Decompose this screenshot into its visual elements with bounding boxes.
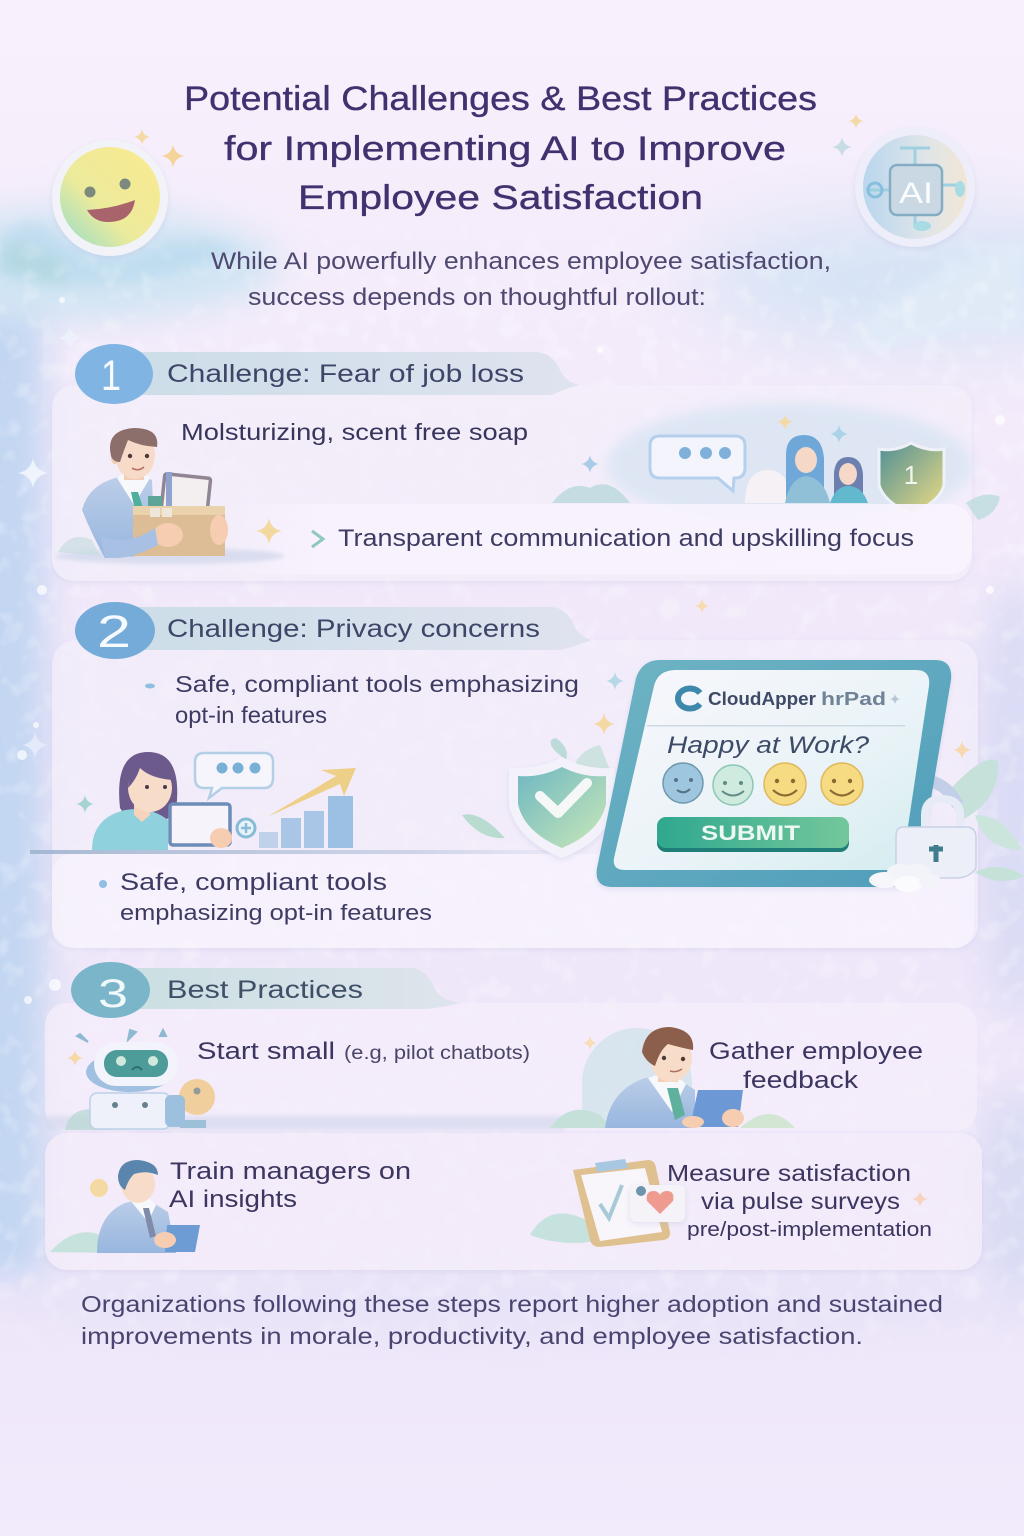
header bar 3 (110, 968, 460, 1009)
text: gather feedback: feedback (743, 1067, 859, 1094)
panel: challenge 2 (30, 599, 1024, 948)
icon: smiley badge (52, 129, 184, 256)
arrow chevron (312, 531, 323, 547)
title: for Implementing AI to Improve (224, 130, 786, 168)
text: safe tools top: Safe, compliant tools emphasizing (175, 671, 579, 697)
text: measure satisfaction: Measure satisfaction (667, 1160, 911, 1186)
illustration: survey tablet (597, 660, 951, 887)
illustration: shield with check (462, 738, 615, 858)
illustration: employee with tablet and chart (30, 752, 590, 854)
background wash (0, 200, 1024, 1333)
text: safe tools bottom (99, 869, 432, 925)
divider band (45, 1116, 565, 1130)
header bar 1 (110, 352, 580, 395)
text: soap line: Molsturizing, scent free soap (181, 419, 528, 445)
text: measure satisfaction: via pulse surveys (701, 1188, 900, 1214)
icon: clipboard with heart (530, 1159, 685, 1247)
lower callout 1 (220, 504, 972, 574)
icon: employee with box (55, 428, 285, 564)
text: train managers: AI insights (169, 1186, 297, 1213)
logo: CloudApper (678, 689, 900, 709)
panel 2 card (52, 640, 978, 948)
icon: manager with tablet (50, 1160, 200, 1253)
text: safe tools top (145, 671, 579, 728)
panel: best practices (45, 962, 982, 1270)
number badge 2 (75, 602, 155, 659)
text: measure satisfaction: pre/post-implementation (687, 1219, 932, 1241)
rating faces (663, 763, 863, 805)
number badge 3: 3 (98, 972, 128, 1016)
heading 2: Challenge: Privacy concerns (167, 615, 540, 643)
text: safe tools bottom: Safe, compliant tools (120, 869, 387, 896)
panel 3 lower card (45, 1133, 982, 1270)
number badge 3 (71, 962, 150, 1018)
text: start small (197, 1038, 530, 1065)
text: measure satisfaction (667, 1160, 932, 1241)
illustration: lock and leaves back (920, 759, 1024, 881)
text: gather feedback (709, 1038, 923, 1094)
icon: AI badge (832, 114, 975, 247)
panel 1 card (52, 385, 972, 581)
number badge 1: 1 (101, 352, 121, 400)
conclusion text (81, 1291, 943, 1349)
heading 3: Best Practices (167, 976, 363, 1004)
number badge 2: 2 (97, 606, 131, 657)
text: transparent: Transparent communication and upskilling focus (338, 525, 914, 552)
text: Happy at Work: Happy at Work? (667, 732, 870, 759)
sparkles 3 (583, 1036, 928, 1207)
title: Employee Satisfaction (298, 179, 703, 217)
title (184, 80, 817, 217)
text: safe tools bottom: emphasizing opt-in features (120, 900, 432, 925)
header bar 2 (110, 607, 592, 650)
text: start small: (e.g, pilot chatbots) (344, 1043, 530, 1064)
text: gather feedback: Gather employee (709, 1038, 923, 1065)
text: safe tools top: opt-in features (175, 702, 327, 728)
logo: CloudApper: CloudApper (708, 689, 816, 709)
text: start small: Start small (197, 1038, 335, 1065)
illustration: team with chat bubble (552, 403, 1000, 527)
panel 3 upper card (45, 1003, 977, 1131)
icon: padlock and stones (869, 799, 976, 892)
number badge 1 (75, 344, 153, 404)
icon: robot (65, 1030, 215, 1130)
icon: AI badge: AI (899, 177, 933, 210)
text: train managers: Train managers on (170, 1158, 411, 1185)
illustration: team with chat bubble: 1 (904, 460, 918, 490)
icon: man with tablet (550, 1027, 795, 1128)
heading 1: Challenge: Fear of job loss (167, 360, 524, 388)
conclusion text: improvements in morale, productivity, and employee satisfaction. (81, 1323, 863, 1349)
lower strip (52, 854, 974, 948)
sparkles 2 (593, 599, 971, 759)
intro text: While AI powerfully enhances employee satisfaction, (211, 248, 831, 275)
intro text (211, 248, 831, 311)
panel: challenge 1 (52, 344, 1000, 581)
title: Potential Challenges & Best Practices (184, 80, 817, 118)
conclusion text: Organizations following these steps report higher adoption and sustained (81, 1291, 943, 1317)
submit button (657, 817, 849, 852)
text: train managers (169, 1158, 411, 1213)
logo: CloudApper: hrPad (821, 689, 886, 709)
intro text: success depends on thoughtful rollout: (248, 284, 706, 311)
submit button: SUBMIT (701, 822, 800, 845)
